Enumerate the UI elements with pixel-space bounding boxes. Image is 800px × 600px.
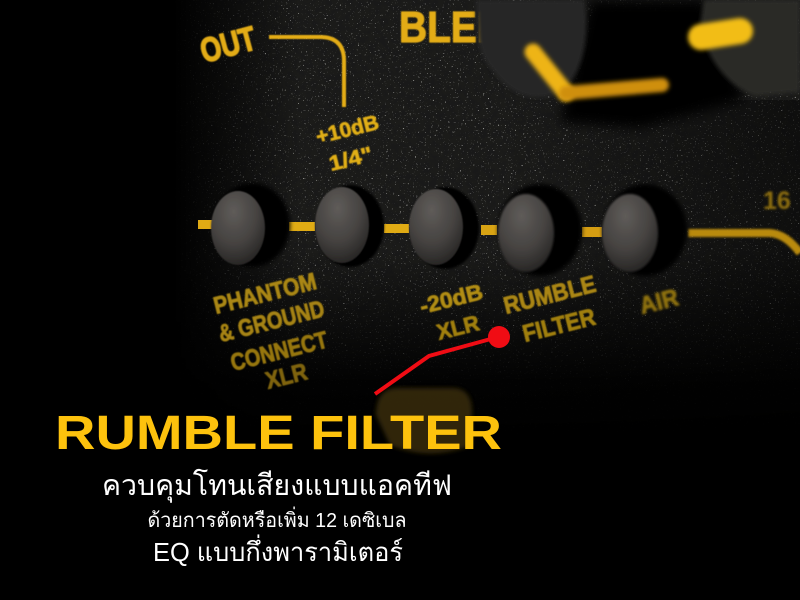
- icon: large blurred knobs, top right: [476, 0, 800, 128]
- text block: Thai description line 3: EQ แบบกึ่งพารามิเตอร์: [153, 534, 403, 567]
- icon: air button: [602, 184, 687, 276]
- label: BLEND heading cut off by knob: BLEN: [399, 3, 505, 52]
- label: phantom and ground connect XLR: XLR: [263, 358, 310, 395]
- label: -20dB XLR: -20dB: [417, 279, 485, 319]
- icon: push buttons row: [211, 183, 687, 276]
- label: rumble filter on panel: [501, 271, 599, 348]
- icon: -20dB button: [409, 187, 479, 269]
- label: rumble filter on panel: RUMBLE: [501, 271, 599, 320]
- label: +10dB 1/4 inch: [314, 111, 381, 176]
- title: RUMBLE FILTER: RUMBLE FILTER: [55, 407, 502, 460]
- label: -20dB XLR: XLR: [434, 310, 482, 345]
- icon: faded yellow button below: [376, 388, 472, 454]
- icon: rumble filter button: [498, 184, 582, 276]
- label: +10dB 1/4 inch: +10dB: [314, 111, 381, 149]
- label: 16 partial at right: 16: [763, 187, 791, 215]
- icon: +10dB button: [315, 185, 384, 267]
- label: +10dB 1/4 inch: 1/4": [327, 143, 375, 176]
- arrow: red pointer line with dot: [375, 326, 510, 394]
- label: phantom and ground connect XLR: CONNECT: [228, 327, 331, 377]
- label: rumble filter on panel: FILTER: [520, 304, 598, 348]
- yellow connector dashes: [198, 220, 800, 253]
- label: AIR: AIR: [637, 284, 681, 320]
- text block: Thai description line 2: ด้วยการตัดหรือเพิ่ม 12 เดซิเบล: [148, 506, 406, 532]
- label: phantom and ground connect XLR: & GROUND: [216, 295, 327, 348]
- label: -20dB XLR: [417, 279, 485, 345]
- text block: Thai description line 1: ควบคุมโทนเสียงแบบแอคทีฟ: [102, 468, 452, 503]
- icon: phantom button: [211, 183, 290, 267]
- label: phantom and ground connect XLR: PHANTOM: [211, 268, 319, 320]
- label: phantom and ground connect XLR: [211, 268, 331, 395]
- label: OUT with connector line: OUT: [196, 19, 260, 71]
- label: OUT with connector line: [196, 19, 344, 107]
